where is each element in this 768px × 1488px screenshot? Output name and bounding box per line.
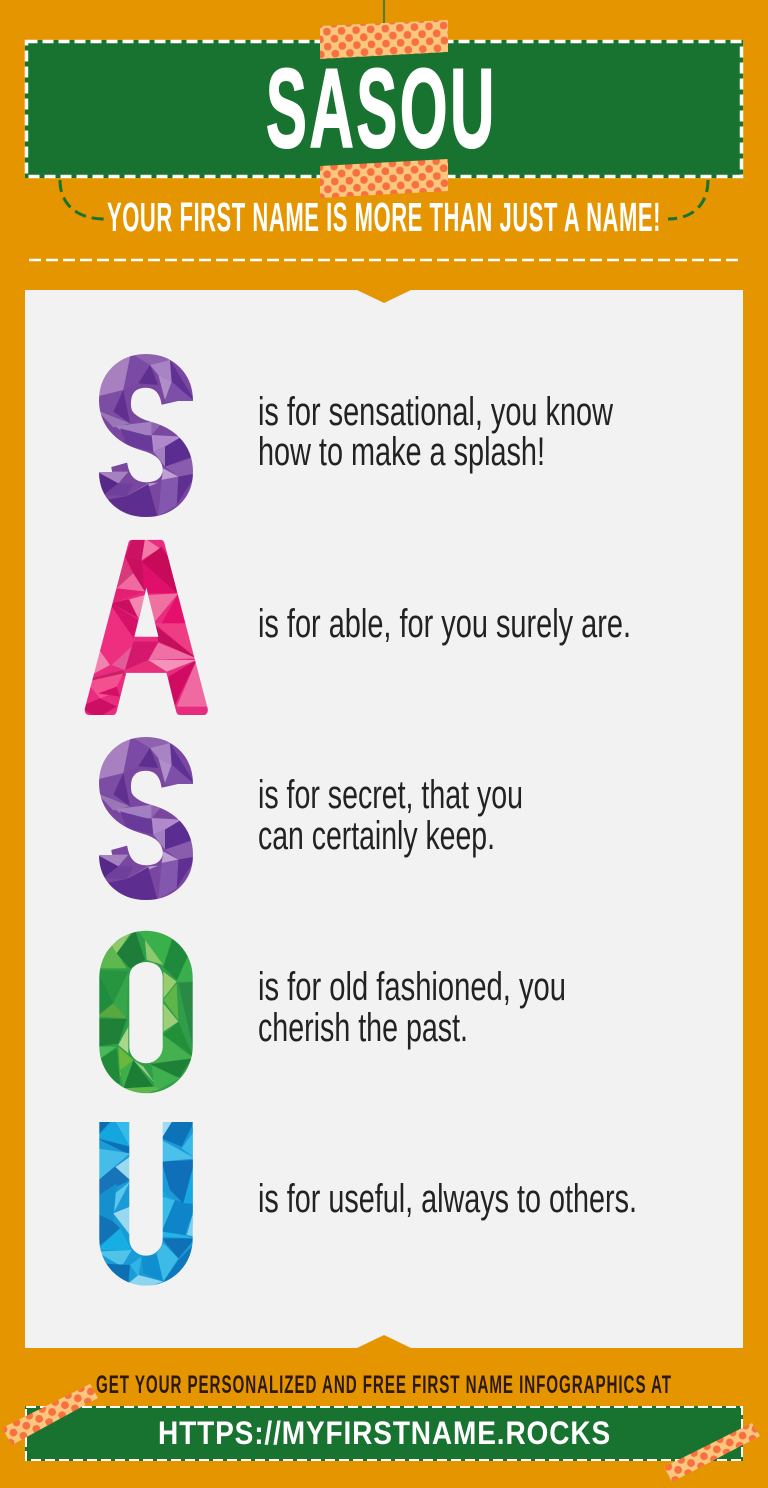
text: S line: is for sensational, you know: [258, 390, 613, 434]
thread: [383, 0, 385, 26]
letter S: [99, 737, 193, 900]
text: S line: how to make a splash!: [258, 430, 545, 474]
text: O line: is for old fashioned, you: [258, 965, 566, 1009]
footer url: HTTPS://MYFIRSTNAME.ROCKS: [158, 1415, 611, 1451]
curved connector: right: [668, 180, 708, 219]
tape: top: [320, 20, 448, 59]
letter S: [99, 354, 193, 517]
text: S line: can certainly keep.: [258, 814, 495, 858]
text: S line: is for secret, that you: [258, 773, 523, 817]
text: O line: [258, 965, 566, 1050]
letter O: [99, 930, 193, 1094]
curved connector: left: [60, 180, 104, 219]
panel: paper: [25, 290, 743, 1348]
letter U: [99, 1122, 193, 1286]
dashed divider: [29, 259, 739, 261]
text: S line: [258, 773, 523, 858]
tape: footer left: [2, 1384, 98, 1445]
tape: footer right: [664, 1423, 760, 1482]
text: S line: [258, 390, 613, 474]
tape: bottom: [320, 159, 448, 198]
title: SASOU: [266, 46, 497, 171]
text: A line: is for able, for you surely are.: [258, 602, 631, 646]
text: O line: cherish the past.: [258, 1006, 468, 1050]
title banner: [25, 40, 743, 178]
footer banner: [25, 1406, 743, 1461]
letter A: [84, 540, 208, 715]
